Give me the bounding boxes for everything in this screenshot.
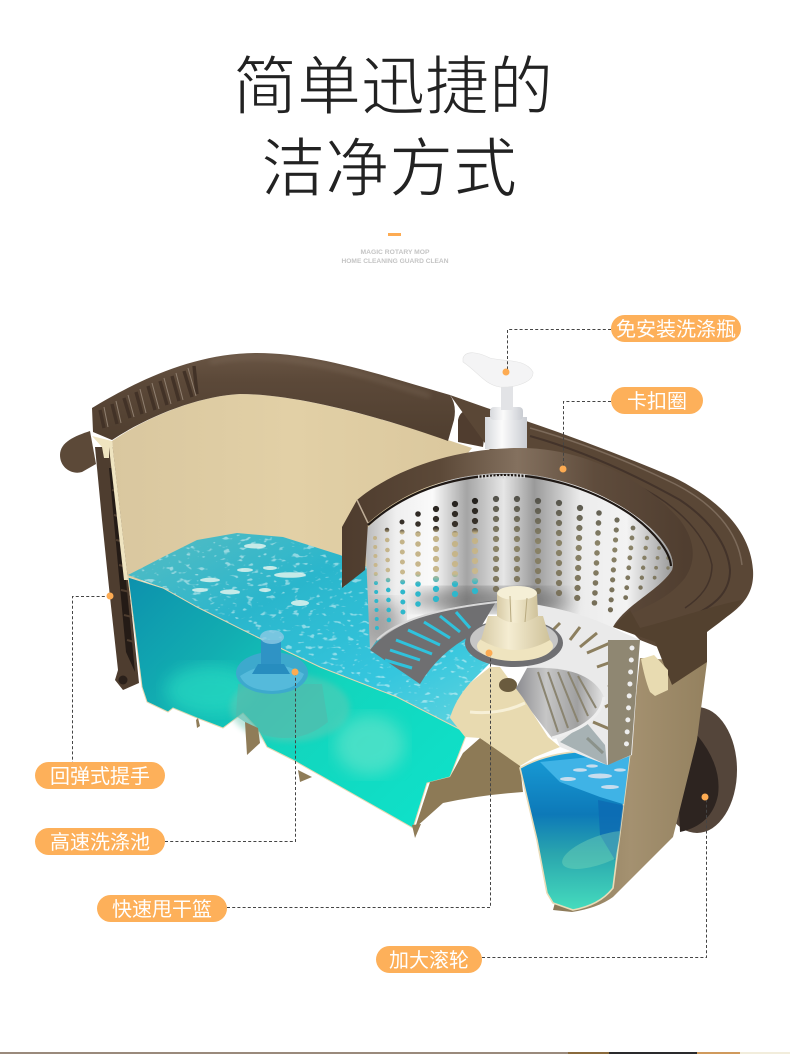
accent dash (388, 233, 401, 236)
right shell (553, 658, 707, 912)
basket floor right with slots (497, 600, 640, 765)
cream wall edge (92, 436, 128, 580)
icon: cream spindle hub (477, 586, 553, 661)
icon: roller wheel (657, 707, 737, 833)
bottom image edge strip (0, 1052, 790, 1054)
label: 回弹式提手 (35, 762, 165, 789)
tan center post (450, 667, 560, 766)
gray bearing ring (465, 619, 563, 667)
title: 简单迅捷的 (233, 51, 553, 123)
back tan wall (112, 394, 472, 590)
mop bucket cutaway illustration (60, 353, 753, 912)
outer rim band (450, 395, 753, 653)
blue spinner pedestal (230, 630, 350, 742)
label: 免安装洗涤瓶: 免安装洗涤瓶 (616, 318, 736, 341)
title: 洁净方式 (261, 133, 517, 205)
bottle clip tab (458, 410, 487, 447)
marker dots (106, 368, 708, 800)
subtitle (342, 249, 449, 265)
label: 回弹式提手: 回弹式提手 (50, 765, 150, 788)
leader lines (72, 330, 706, 958)
metal spin cone (515, 668, 604, 738)
icon: detergent pump bottle (463, 353, 533, 449)
subtitle: MAGIC ROTARY MOP (360, 249, 430, 256)
basket perforated wall (365, 473, 673, 650)
label: 加大滚轮: 加大滚轮 (389, 949, 469, 972)
title (233, 51, 553, 205)
label: 高速洗涤池 (35, 828, 165, 855)
label: 加大滚轮 (376, 946, 482, 973)
basket floor left (370, 600, 497, 684)
label: 卡扣圈 (611, 387, 703, 414)
right tub water (520, 751, 642, 910)
center arch underside (415, 738, 523, 828)
front rim corner (613, 600, 742, 685)
wash tub water front (128, 577, 467, 828)
basket assembly (365, 473, 673, 766)
label: 卡扣圈: 卡扣圈 (627, 390, 687, 413)
label: 高速洗涤池: 高速洗涤池 (50, 831, 150, 854)
left rebound handle (60, 431, 139, 690)
label: 快速甩干篮: 快速甩干篮 (112, 898, 212, 921)
subtitle: HOME CLEANING GUARD CLEAN (342, 258, 449, 265)
label: 快速甩干篮 (97, 895, 227, 922)
cream clip (641, 655, 668, 696)
back rim (92, 353, 455, 441)
under-tub flanges (196, 718, 421, 838)
snap ring 卡扣圈 (342, 448, 693, 627)
water surface (128, 533, 490, 728)
